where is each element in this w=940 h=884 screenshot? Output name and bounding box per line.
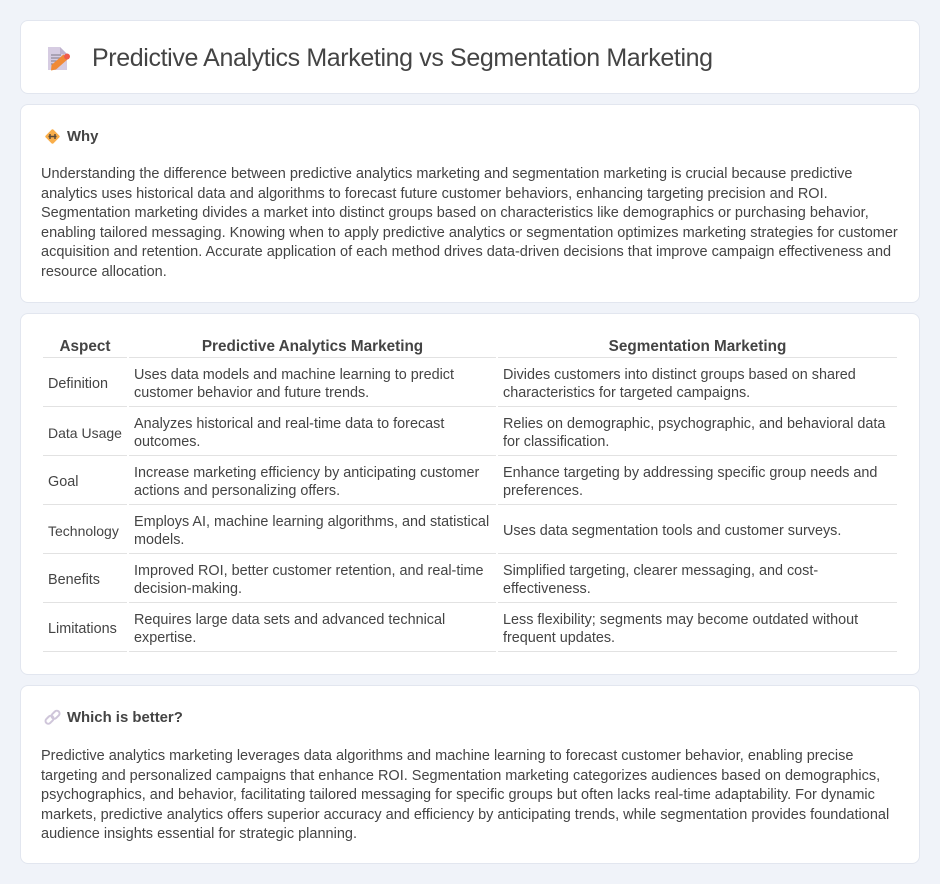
row: goal: Goal (48, 474, 78, 490)
row: definition (43, 367, 897, 407)
row: goal: Increase marketing efficiency by anticipating customer (134, 465, 479, 481)
row: data usage: outcomes. (134, 434, 200, 450)
icon: document with pencil (48, 47, 70, 70)
row: data usage (43, 416, 897, 456)
heading: why: Why (67, 129, 98, 145)
row: goal: preferences. (503, 483, 583, 499)
row: limitations: expertise. (134, 630, 196, 646)
row: benefits: effectiveness. (503, 581, 591, 597)
text block: why: acquisition and retention. Accurate application of each method drives data-driven decisions that improve campaign effectiveness and (41, 244, 891, 260)
row: technology: Employs AI, machine learning algorithms, and statistical (134, 514, 489, 530)
text block: which is better (41, 748, 889, 842)
text block: which is better: audience insights essential for strategic planning. (41, 826, 357, 842)
table header (43, 338, 897, 358)
row: technology: Technology (48, 523, 119, 539)
row: data usage: Analyzes historical and real-time data to forecast (134, 416, 444, 432)
table header: Predictive Analytics Marketing (202, 338, 423, 355)
title: Predictive Analytics Marketing vs Segmentation Marketing (92, 44, 713, 72)
text block: why: analytics uses historical data and algorithms to forecast future customer behaviors, enhancing targeting precision and ROI. (41, 186, 828, 202)
row: definition: customer behavior and future trends. (134, 385, 369, 401)
row: data usage: for classification. (503, 434, 609, 450)
row: definition: Definition (48, 376, 108, 392)
row: definition: Divides customers into distinct groups based on shared (503, 367, 856, 383)
table header: Aspect (59, 338, 110, 355)
row: goal: Enhance targeting by addressing specific group needs and (503, 465, 877, 481)
row: benefits: decision-making. (134, 581, 242, 597)
row: limitations (43, 612, 897, 652)
text block: which is better: Predictive analytics marketing leverages data algorithms and machine learning to forecast customer behavior, enabling precise (41, 748, 853, 764)
row: benefits: Simplified targeting, clearer messaging, and cost- (503, 563, 818, 579)
panel: header (20, 20, 920, 94)
panel: why (20, 104, 920, 303)
row: benefits: Improved ROI, better customer retention, and real-time (134, 563, 484, 579)
text block: why: resource allocation. (41, 264, 167, 280)
text block: which is better: markets, predictive analytics offers superior accuracy and efficiency by anticipating trends, while segmentation provides foundational (41, 807, 889, 823)
panel: which is better (20, 685, 920, 864)
row: data usage: Data Usage (48, 425, 122, 441)
row: data usage: Relies on demographic, psychographic, and behavioral data (503, 416, 885, 432)
row: goal (43, 465, 897, 505)
text block: why (41, 166, 898, 280)
text block: which is better: psychographics, and behavior, facilitating tailored messaging for specific groups but often lacks real-time adaptability. For dynamic (41, 787, 875, 803)
text block: which is better: targeting and personalized campaigns that enhance ROI. Segmentation marketing categorizes audiences based on demographics, (41, 768, 880, 784)
icon: chain link (44, 710, 60, 725)
text block: why: enabling tailored messaging. Knowing when to apply predictive analytics or segmentation optimizes marketing strategies for customer (41, 225, 898, 241)
text block: why: Segmentation marketing divides a market into distinct groups based on characteristics like demographics or purchasing behavior, (41, 205, 869, 221)
row: benefits (43, 563, 897, 603)
row: goal: actions and personalizing offers. (134, 483, 340, 499)
panel: comparison table (20, 313, 920, 675)
icon: orange warning diamond (45, 129, 60, 144)
row: benefits: Benefits (48, 572, 100, 588)
row: definition: characteristics for targeted campaigns. (503, 385, 750, 401)
row: technology (43, 514, 897, 554)
row: limitations: frequent updates. (503, 630, 615, 646)
text block: why: Understanding the difference between predictive analytics marketing and segmentation marketing is crucial because predictive (41, 166, 852, 182)
row: limitations: Requires large data sets and advanced technical (134, 612, 445, 628)
row: technology: models. (134, 532, 184, 548)
heading: which is better: Which is better? (67, 710, 183, 726)
row: definition: Uses data models and machine learning to predict (134, 367, 454, 383)
row: limitations: Limitations (48, 621, 117, 637)
row: limitations: Less flexibility; segments may become outdated without (503, 612, 858, 628)
table header: Segmentation Marketing (609, 338, 786, 355)
row: technology: Uses data segmentation tools and customer surveys. (503, 523, 841, 539)
